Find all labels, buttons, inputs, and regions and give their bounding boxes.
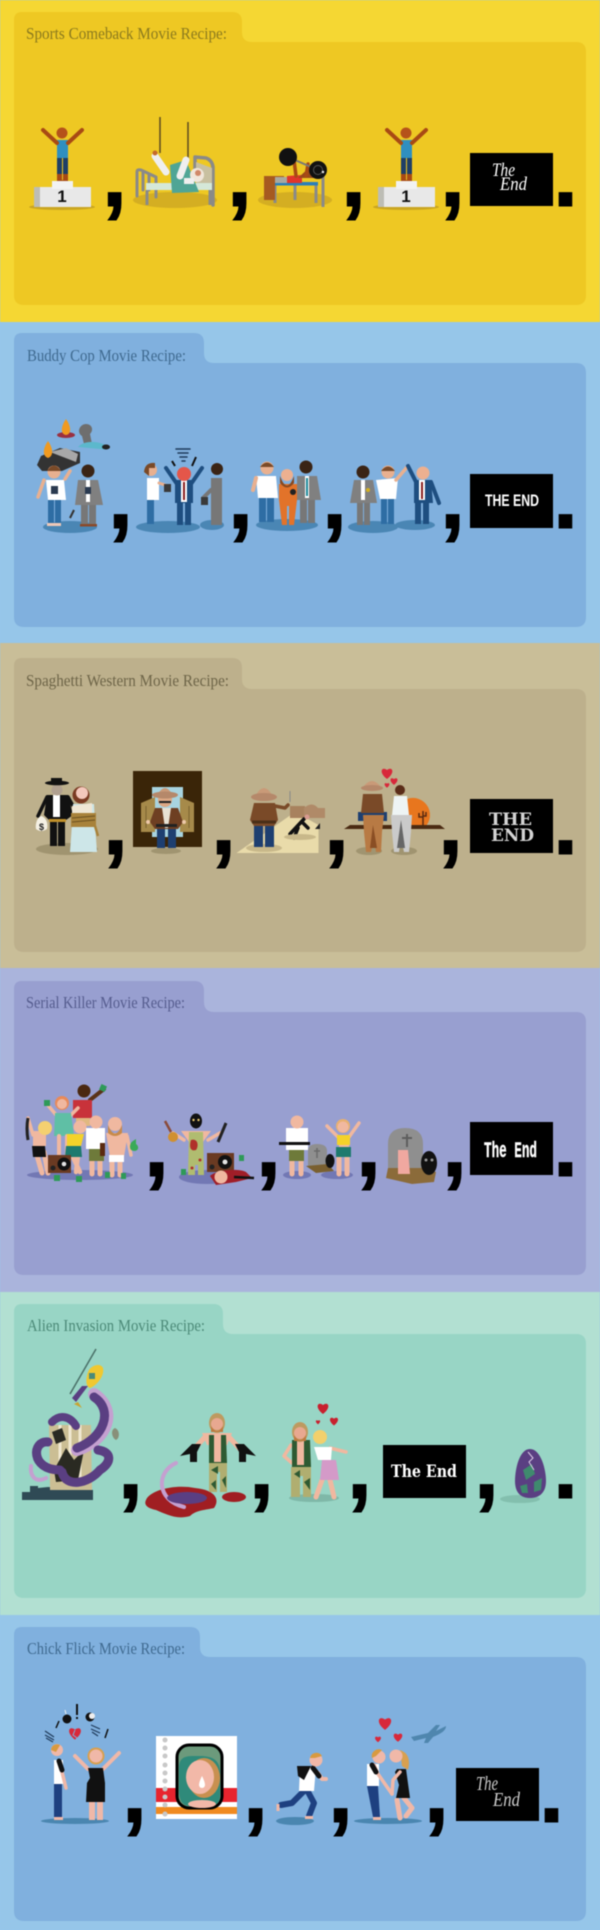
heading: serial killer: Serial Killer Movie Recipe:: [26, 993, 185, 1012]
comma: ,: [440, 126, 465, 226]
panel: buddy cop: [0, 322, 600, 643]
the end card: [470, 1122, 553, 1175]
the end card: [470, 799, 553, 853]
the end card: [383, 1445, 466, 1498]
icon: bench press: [258, 148, 332, 208]
comma: ,: [243, 1742, 268, 1842]
comma: ,: [227, 126, 252, 226]
panel: sports comeback: [0, 0, 600, 322]
comma: ,: [442, 1096, 467, 1196]
the end card: [470, 153, 553, 206]
icon: gunslinger in saloon doors: [133, 771, 202, 854]
the end card: THE: [489, 810, 532, 830]
icon: athlete on podium: 1: [57, 187, 67, 206]
icon: hero with guns over dead tentacle: [145, 1413, 256, 1517]
the end card: End: [499, 174, 527, 195]
panel: chick flick: [0, 1615, 600, 1930]
period: .: [539, 1742, 564, 1842]
period: .: [553, 1096, 578, 1196]
icon: outlaw and tied-up woman: $: [39, 822, 44, 832]
the end card: The: [492, 160, 515, 181]
icon: crying face in airplane window on notebook: [156, 1736, 237, 1819]
icon: teen party: [27, 1084, 138, 1182]
comma: ,: [249, 1418, 274, 1518]
panel: spaghetti western: [0, 643, 600, 968]
period: .: [553, 1418, 578, 1518]
heading: alien invasion: Alien Invasion Movie Recipe:: [27, 1316, 205, 1335]
icon: breakup argument: [41, 1704, 119, 1824]
icon: cops with prisoner: [253, 460, 321, 531]
the end card: End: [492, 1789, 521, 1811]
panel: alien invasion: [0, 1292, 600, 1615]
the end card: The End: [391, 1462, 457, 1482]
icon: hero and girl with hearts: [284, 1404, 346, 1502]
icon: athlete on podium again: 1: [401, 187, 411, 206]
icon: two cops and happy chief: [348, 466, 439, 533]
panel: serial killer: [0, 968, 600, 1292]
comma: ,: [103, 774, 128, 874]
icon: outlaw and tied-up woman: [36, 778, 98, 855]
the end card: The End: [484, 1139, 537, 1164]
the end card: The: [476, 1773, 498, 1795]
the end card: [456, 1768, 539, 1821]
comma: ,: [228, 448, 253, 548]
comma: ,: [122, 1742, 147, 1842]
heading: chick flick: Chick Flick Movie Recipe:: [27, 1639, 185, 1658]
comma: ,: [424, 1742, 449, 1842]
icon: airport kiss with plane: [354, 1718, 446, 1824]
comma: ,: [322, 448, 347, 548]
comma: ,: [341, 126, 366, 226]
comma: ,: [328, 1742, 353, 1842]
comma: ,: [211, 774, 236, 874]
comma: ,: [474, 1418, 499, 1518]
icon: angry chief with two cops: [136, 449, 224, 533]
heading: sports comeback: Sports Comeback Movie Recipe:: [26, 24, 227, 43]
period: .: [553, 774, 578, 874]
comma: ,: [324, 774, 349, 874]
icon: athlete on podium again: [373, 128, 439, 210]
comma: ,: [144, 1096, 169, 1196]
icon: duel in the street: [236, 788, 325, 853]
comma: ,: [118, 1418, 143, 1518]
icon: last survivors at grave: [279, 1116, 359, 1179]
icon: hand rising from grave with mask: [386, 1128, 437, 1184]
icon: athlete on podium: [29, 128, 95, 210]
the end card: THE END: [485, 491, 539, 510]
comma: ,: [108, 448, 133, 548]
comma: ,: [356, 1096, 381, 1196]
icon: riding into the sunset: [344, 769, 445, 855]
icon: tentacles attacking building and helicopter: [22, 1349, 119, 1500]
icon: explosions and two cops: [37, 419, 110, 533]
heading: buddy cop: Buddy Cop Movie Recipe:: [27, 346, 186, 365]
comma: ,: [438, 774, 463, 874]
icon: masked killer and victim: [165, 1114, 254, 1185]
period: .: [553, 448, 578, 548]
icon: alien egg: [500, 1449, 546, 1503]
the end card: [470, 474, 553, 528]
comma: ,: [256, 1096, 281, 1196]
comma: ,: [102, 126, 127, 226]
the end card: END: [491, 826, 534, 846]
heading: spaghetti western: Spaghetti Western Movie Recipe:: [26, 671, 229, 690]
icon: running man: [276, 1753, 326, 1825]
comma: ,: [440, 448, 465, 548]
comma: ,: [347, 1418, 372, 1518]
icon: injured athlete in hospital bed: [133, 117, 217, 208]
period: .: [553, 126, 578, 226]
